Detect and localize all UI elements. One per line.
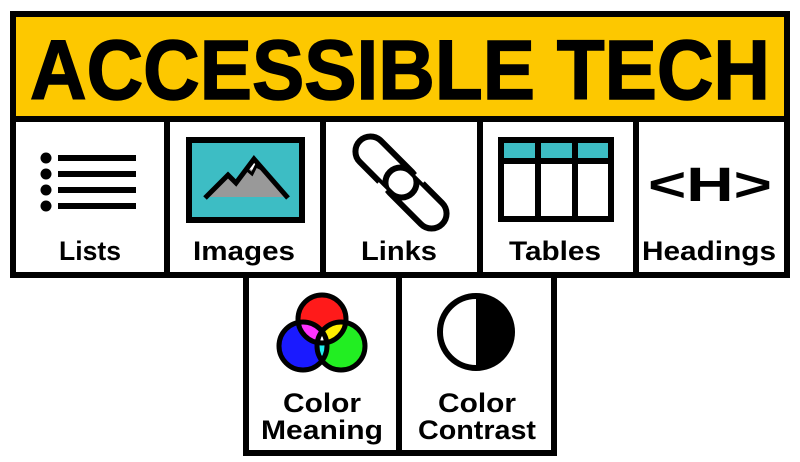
labels bottom row: Color <box>438 388 517 418</box>
icon: image <box>189 140 302 220</box>
labels bottom row: Color <box>283 388 362 418</box>
labels top row <box>59 236 776 266</box>
labels bottom row: Contrast <box>418 415 536 445</box>
icon: list <box>40 152 136 212</box>
icon: link <box>349 130 453 235</box>
icon: table <box>501 140 611 219</box>
labels bottom row: Meaning <box>261 415 383 445</box>
bottom row panels <box>246 275 554 453</box>
icon: color contrast <box>440 296 512 368</box>
icon: heading: <H> <box>648 159 772 212</box>
labels top row: Links <box>361 236 437 266</box>
labels bottom row <box>261 388 536 445</box>
labels top row: Headings <box>642 236 776 266</box>
title banner: ACCESSIBLE TECH <box>30 23 770 117</box>
labels top row: Tables <box>509 236 601 266</box>
labels top row: Images <box>193 236 295 266</box>
top row panels <box>13 119 787 275</box>
labels top row: Lists <box>59 236 121 266</box>
icon: color meaning <box>279 295 365 370</box>
